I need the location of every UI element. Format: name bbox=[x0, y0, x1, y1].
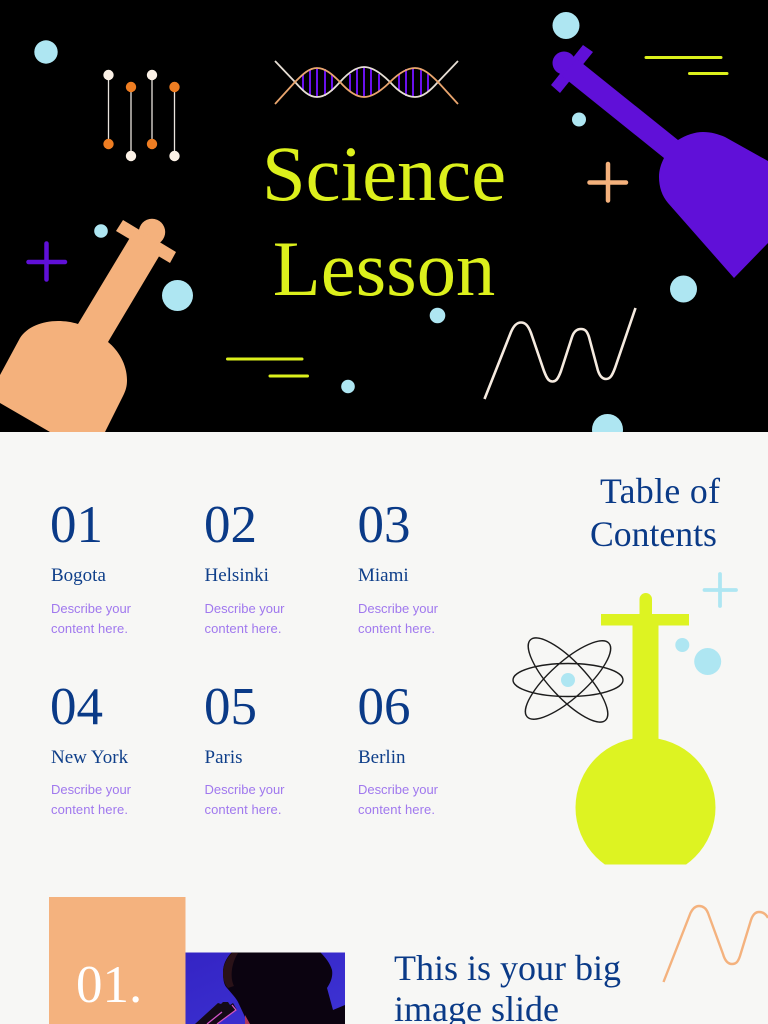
panel: big image slide bbox=[49, 897, 768, 1024]
slide number: 01. bbox=[76, 956, 142, 1014]
lime dashes left bbox=[228, 359, 308, 376]
squiggle line bbox=[484, 308, 636, 399]
item 04: content here. bbox=[51, 802, 128, 817]
bubbles bbox=[675, 638, 721, 675]
image: scientist at microscope bbox=[185, 952, 345, 1024]
icon: molecule pins bbox=[103, 70, 180, 161]
item 03: Describe your bbox=[358, 601, 439, 616]
item 02: Helsinki bbox=[204, 565, 269, 586]
item 06: Berlin bbox=[358, 747, 406, 768]
title: Science bbox=[262, 130, 506, 217]
bubbles bbox=[34, 12, 697, 445]
item 03: Miami bbox=[358, 565, 409, 586]
item 05: Paris bbox=[204, 747, 242, 768]
contents heading bbox=[590, 471, 720, 554]
item 03: 03 bbox=[358, 496, 410, 554]
icon: purple flask bbox=[551, 45, 768, 278]
item 01: Bogota bbox=[51, 565, 106, 586]
slide heading bbox=[394, 948, 621, 1024]
item 06: content here. bbox=[358, 802, 435, 817]
item 04: New York bbox=[51, 747, 129, 768]
icon: lime round flask bbox=[576, 593, 716, 878]
item 01: Describe your bbox=[51, 601, 132, 616]
contents heading: Table of bbox=[600, 471, 720, 511]
item 05 bbox=[204, 678, 285, 817]
icon: peach flask bbox=[0, 219, 176, 432]
item 03 bbox=[358, 496, 439, 636]
item 05: 05 bbox=[204, 678, 257, 736]
title: Lesson bbox=[273, 225, 495, 312]
squiggle line bbox=[664, 906, 768, 982]
panel: title hero bbox=[0, 0, 768, 445]
icon: peach plus bbox=[590, 164, 626, 200]
item 01 bbox=[50, 496, 132, 636]
item 02: 02 bbox=[204, 496, 257, 554]
slide heading: This is your big bbox=[394, 948, 621, 988]
icon: DNA helix bbox=[275, 61, 458, 104]
item 06 bbox=[358, 678, 439, 817]
panel: table of contents bbox=[50, 471, 736, 878]
item 05: Describe your bbox=[204, 782, 285, 797]
icon: light blue plus bbox=[704, 574, 736, 606]
contents heading: Contents bbox=[590, 514, 717, 554]
item 06: 06 bbox=[358, 678, 410, 736]
item 05: content here. bbox=[204, 802, 282, 817]
peach number block bbox=[49, 897, 186, 1024]
item 01: 01 bbox=[50, 496, 103, 554]
icon: purple plus bbox=[28, 244, 65, 280]
item 04: Describe your bbox=[51, 782, 132, 797]
item 04: 04 bbox=[50, 678, 103, 736]
title bbox=[267, 148, 504, 296]
item 04 bbox=[50, 678, 132, 817]
item 02: Describe your bbox=[204, 601, 285, 616]
item 02: content here. bbox=[204, 621, 282, 636]
item 06: Describe your bbox=[358, 782, 439, 797]
item 02 bbox=[204, 496, 285, 636]
item 01: content here. bbox=[51, 621, 128, 636]
item 03: content here. bbox=[358, 621, 435, 636]
lime dashes right bbox=[646, 58, 727, 74]
icon: atom bbox=[513, 627, 623, 733]
